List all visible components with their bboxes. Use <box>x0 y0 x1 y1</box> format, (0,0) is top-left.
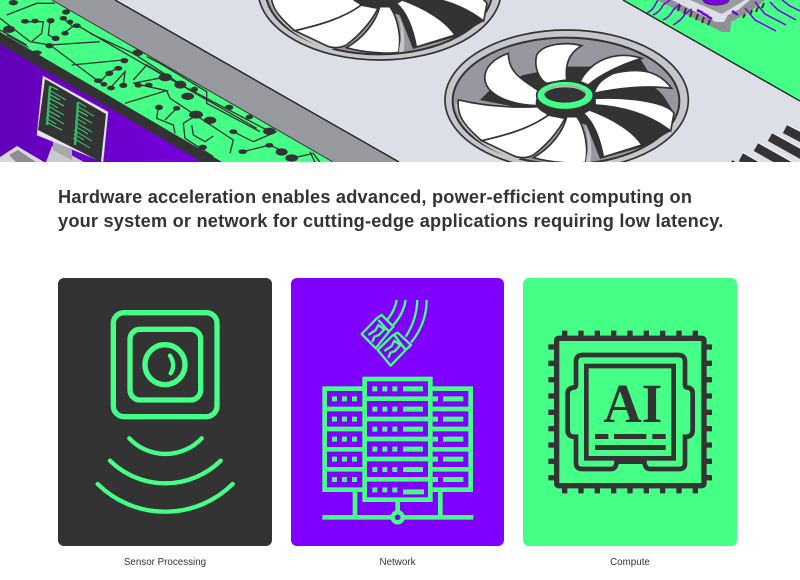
keyboard <box>0 146 44 162</box>
intro text: Hardware acceleration enables advanced, power-efficient computing on <box>58 187 692 207</box>
icon: server racks and cables <box>322 300 474 524</box>
shroud background <box>0 0 800 162</box>
fan, upper <box>258 0 501 60</box>
intro text <box>58 187 723 231</box>
fan, lower <box>445 30 688 170</box>
dark board edge <box>0 32 222 162</box>
green circuit board with traces <box>0 0 345 162</box>
label: network: Network <box>380 557 415 568</box>
icon: camera sensor <box>96 310 235 514</box>
panel: network <box>291 278 504 546</box>
purple motherboard area <box>0 30 240 162</box>
hero illustration: graphics card <box>0 0 800 162</box>
heat sink fins, bottom right <box>730 124 800 173</box>
green board, top right <box>623 0 800 101</box>
monitor with code <box>37 76 108 162</box>
label: sensor processing: Sensor Processing <box>124 557 206 568</box>
grey shroud edge band <box>52 0 399 162</box>
icon: AI chip <box>548 330 712 494</box>
processor socket, top right <box>647 0 800 32</box>
icon: AI chip: AI <box>603 373 662 434</box>
intro text: your system or network for cutting-edge applications requiring low latency. <box>58 211 723 231</box>
panel: compute <box>523 278 737 546</box>
panel: sensor processing <box>58 278 272 546</box>
label: compute: Compute <box>610 557 650 568</box>
